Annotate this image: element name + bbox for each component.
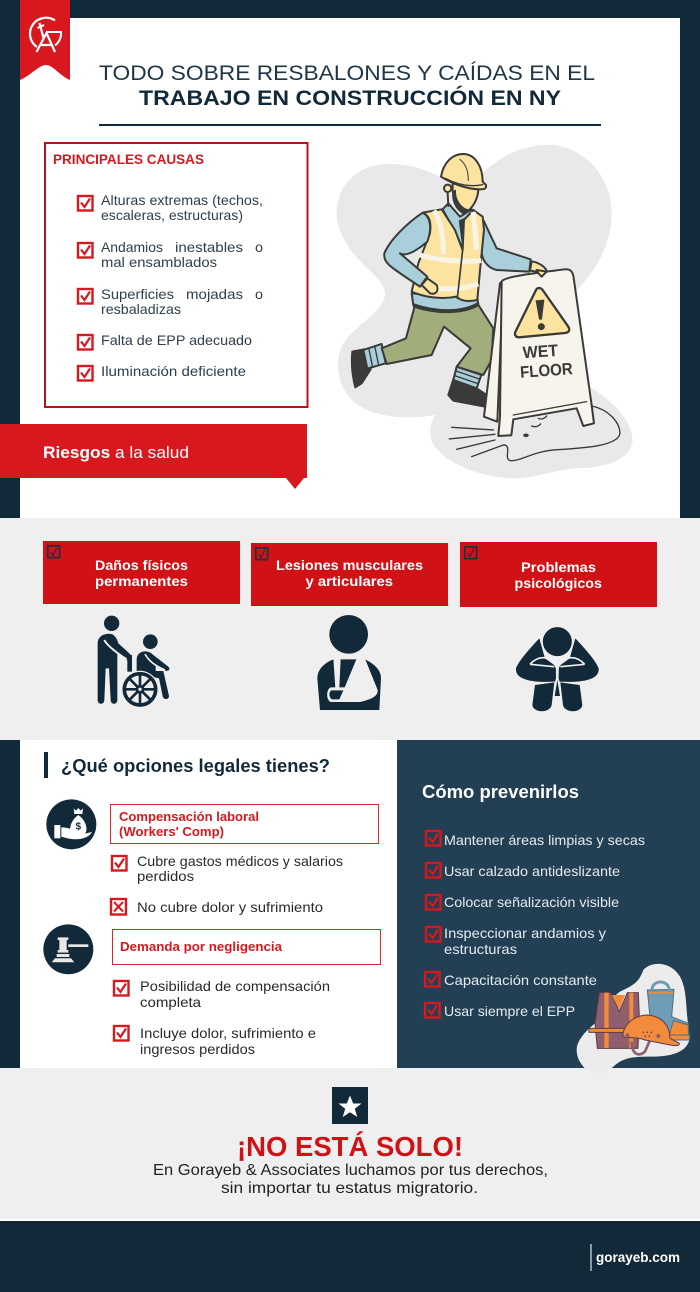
shirt hem and belt [412, 293, 478, 311]
item: EPP: Usar siempre el EPP [444, 1003, 575, 1019]
illustration: safety gear [577, 964, 690, 1073]
text: gorayeb message: sin importar tu estatus migratorio. [221, 1180, 478, 1197]
closing message [153, 1087, 548, 1197]
icon: money hand: $ [76, 821, 82, 832]
helmet [632, 1040, 650, 1054]
head [444, 185, 451, 192]
cause: andamios [78, 239, 263, 270]
item: incluye dolor: Incluye dolor, sufrimiento e [140, 1025, 316, 1041]
item: señalización: Colocar señalización visible [444, 894, 619, 910]
sign text: WET [522, 341, 559, 362]
item: no cubre dolor: No cubre dolor y sufrimiento [137, 899, 323, 915]
card: lesiones musculares: Lesiones musculares [276, 557, 423, 573]
cause: superficies: o [255, 286, 263, 302]
item: inspeccionar: estructuras [444, 941, 517, 957]
cause: andamios: o [255, 239, 263, 255]
cause: andamios: inestables [175, 239, 243, 255]
cause: andamios: mal ensamblados [101, 254, 217, 270]
icon: arm in sling [317, 615, 381, 710]
box: demanda por negligencia [112, 930, 380, 964]
ribbon with logo [20, 0, 70, 80]
cause: superficies: mojadas [186, 286, 243, 302]
icon: distressed person [516, 626, 599, 711]
box: compensación laboral: (Workers' Comp) [119, 824, 224, 839]
band: closing message background [0, 1068, 700, 1220]
sign text: FLOOR [519, 359, 573, 382]
helmet [441, 154, 486, 189]
heading: opciones legales: ¿Qué opciones legales tienes? [61, 756, 330, 776]
wet floor sign [484, 280, 503, 422]
item: incluye dolor: ingresos perdidos [140, 1041, 255, 1057]
left shoe [352, 349, 371, 387]
title: TRABAJO EN CONSTRUCCIÓN EN NY [139, 85, 561, 110]
pants [382, 303, 493, 375]
sign text [518, 340, 573, 382]
item: posibilidad de compensación [114, 978, 330, 1010]
cause: superficies: resbaladizas [101, 301, 181, 317]
item: incluye dolor [114, 1025, 316, 1057]
item: cubre gastos: perdidos [137, 868, 194, 884]
banner: riesgos a la salud: Riesgos a la salud [43, 444, 189, 462]
right shoe [448, 379, 487, 407]
heading: principales causas: PRINCIPALES CAUSAS [53, 152, 204, 167]
box: demanda por negligencia: Demanda por negligencia [120, 939, 283, 954]
item: posibilidad de compensación: completa [140, 994, 201, 1010]
item: calzado: Usar calzado antideslizante [444, 863, 620, 879]
right arm [482, 220, 531, 272]
panel: opciones legales [20, 740, 397, 1068]
icon: money hand [46, 799, 96, 849]
cause: superficies [78, 286, 263, 317]
vest [595, 993, 639, 1048]
card: problemas psicológicos: Problemas [521, 559, 596, 575]
boot [647, 989, 689, 1040]
card: problemas psicológicos [460, 542, 657, 607]
vest [412, 209, 484, 301]
website: gorayeb.com [596, 1250, 680, 1265]
icon: gavel [43, 924, 93, 974]
title: TODO SOBRE RESBALONES Y CAÍDAS EN EL [99, 60, 595, 85]
cause: alturas: Alturas extremas (techos, [101, 192, 263, 208]
card: problemas psicológicos: psicológicos [514, 575, 602, 591]
panel: principales causas [45, 143, 308, 407]
puddle and lines [472, 406, 620, 461]
title [99, 60, 595, 110]
item: posibilidad de compensación: Posibilidad de compensación [140, 978, 330, 994]
box: compensación laboral [110, 804, 378, 844]
panel: cómo prevenirlos [397, 740, 700, 1068]
footer [0, 1219, 700, 1292]
left arm [384, 213, 430, 287]
heading: cómo prevenirlos: Cómo prevenirlos [422, 782, 579, 802]
cause: andamios: Andamios [101, 239, 163, 255]
illustration: worker and wet floor sign [337, 145, 633, 478]
item: capacitación: Capacitación constante [444, 972, 597, 988]
item: inspeccionar: Inspeccionar andamios y [444, 925, 606, 941]
card: daños físicos: Daños físicos [95, 557, 188, 573]
text: gorayeb message: En Gorayeb & Associates luchamos por tus derechos, [153, 1162, 548, 1179]
icon: star [332, 1087, 368, 1124]
card: lesiones musculares [251, 543, 448, 606]
item: mantener áreas: Mantener áreas limpias y secas [444, 832, 645, 848]
cause: superficies: Superficies [101, 286, 174, 302]
panel: header and causes [20, 18, 680, 518]
item: inspeccionar [426, 925, 606, 957]
cause: EPP: Falta de EPP adecuado [101, 332, 252, 348]
banner: riesgos a la salud [0, 424, 307, 489]
card: daños físicos [43, 541, 240, 604]
heading: no está solo: ¡NO ESTÁ SOLO! [237, 1131, 463, 1162]
cause: iluminación: Iluminación deficiente [101, 363, 246, 379]
box: compensación laboral: Compensación laboral [119, 809, 259, 824]
collar [443, 203, 477, 250]
text: gorayeb message [153, 1162, 548, 1197]
card: lesiones musculares: y articulares [306, 573, 393, 589]
icon: wheelchair and caregiver [98, 616, 169, 708]
cause: alturas [78, 192, 263, 223]
icon: GA logo [30, 18, 61, 52]
band: riesgos gray background [0, 518, 700, 740]
item: cubre gastos: Cubre gastos médicos y salarios [137, 853, 343, 869]
item: cubre gastos [112, 853, 343, 884]
cause: alturas: escaleras, estructuras) [101, 207, 243, 223]
card: daños físicos: permanentes [95, 573, 188, 589]
